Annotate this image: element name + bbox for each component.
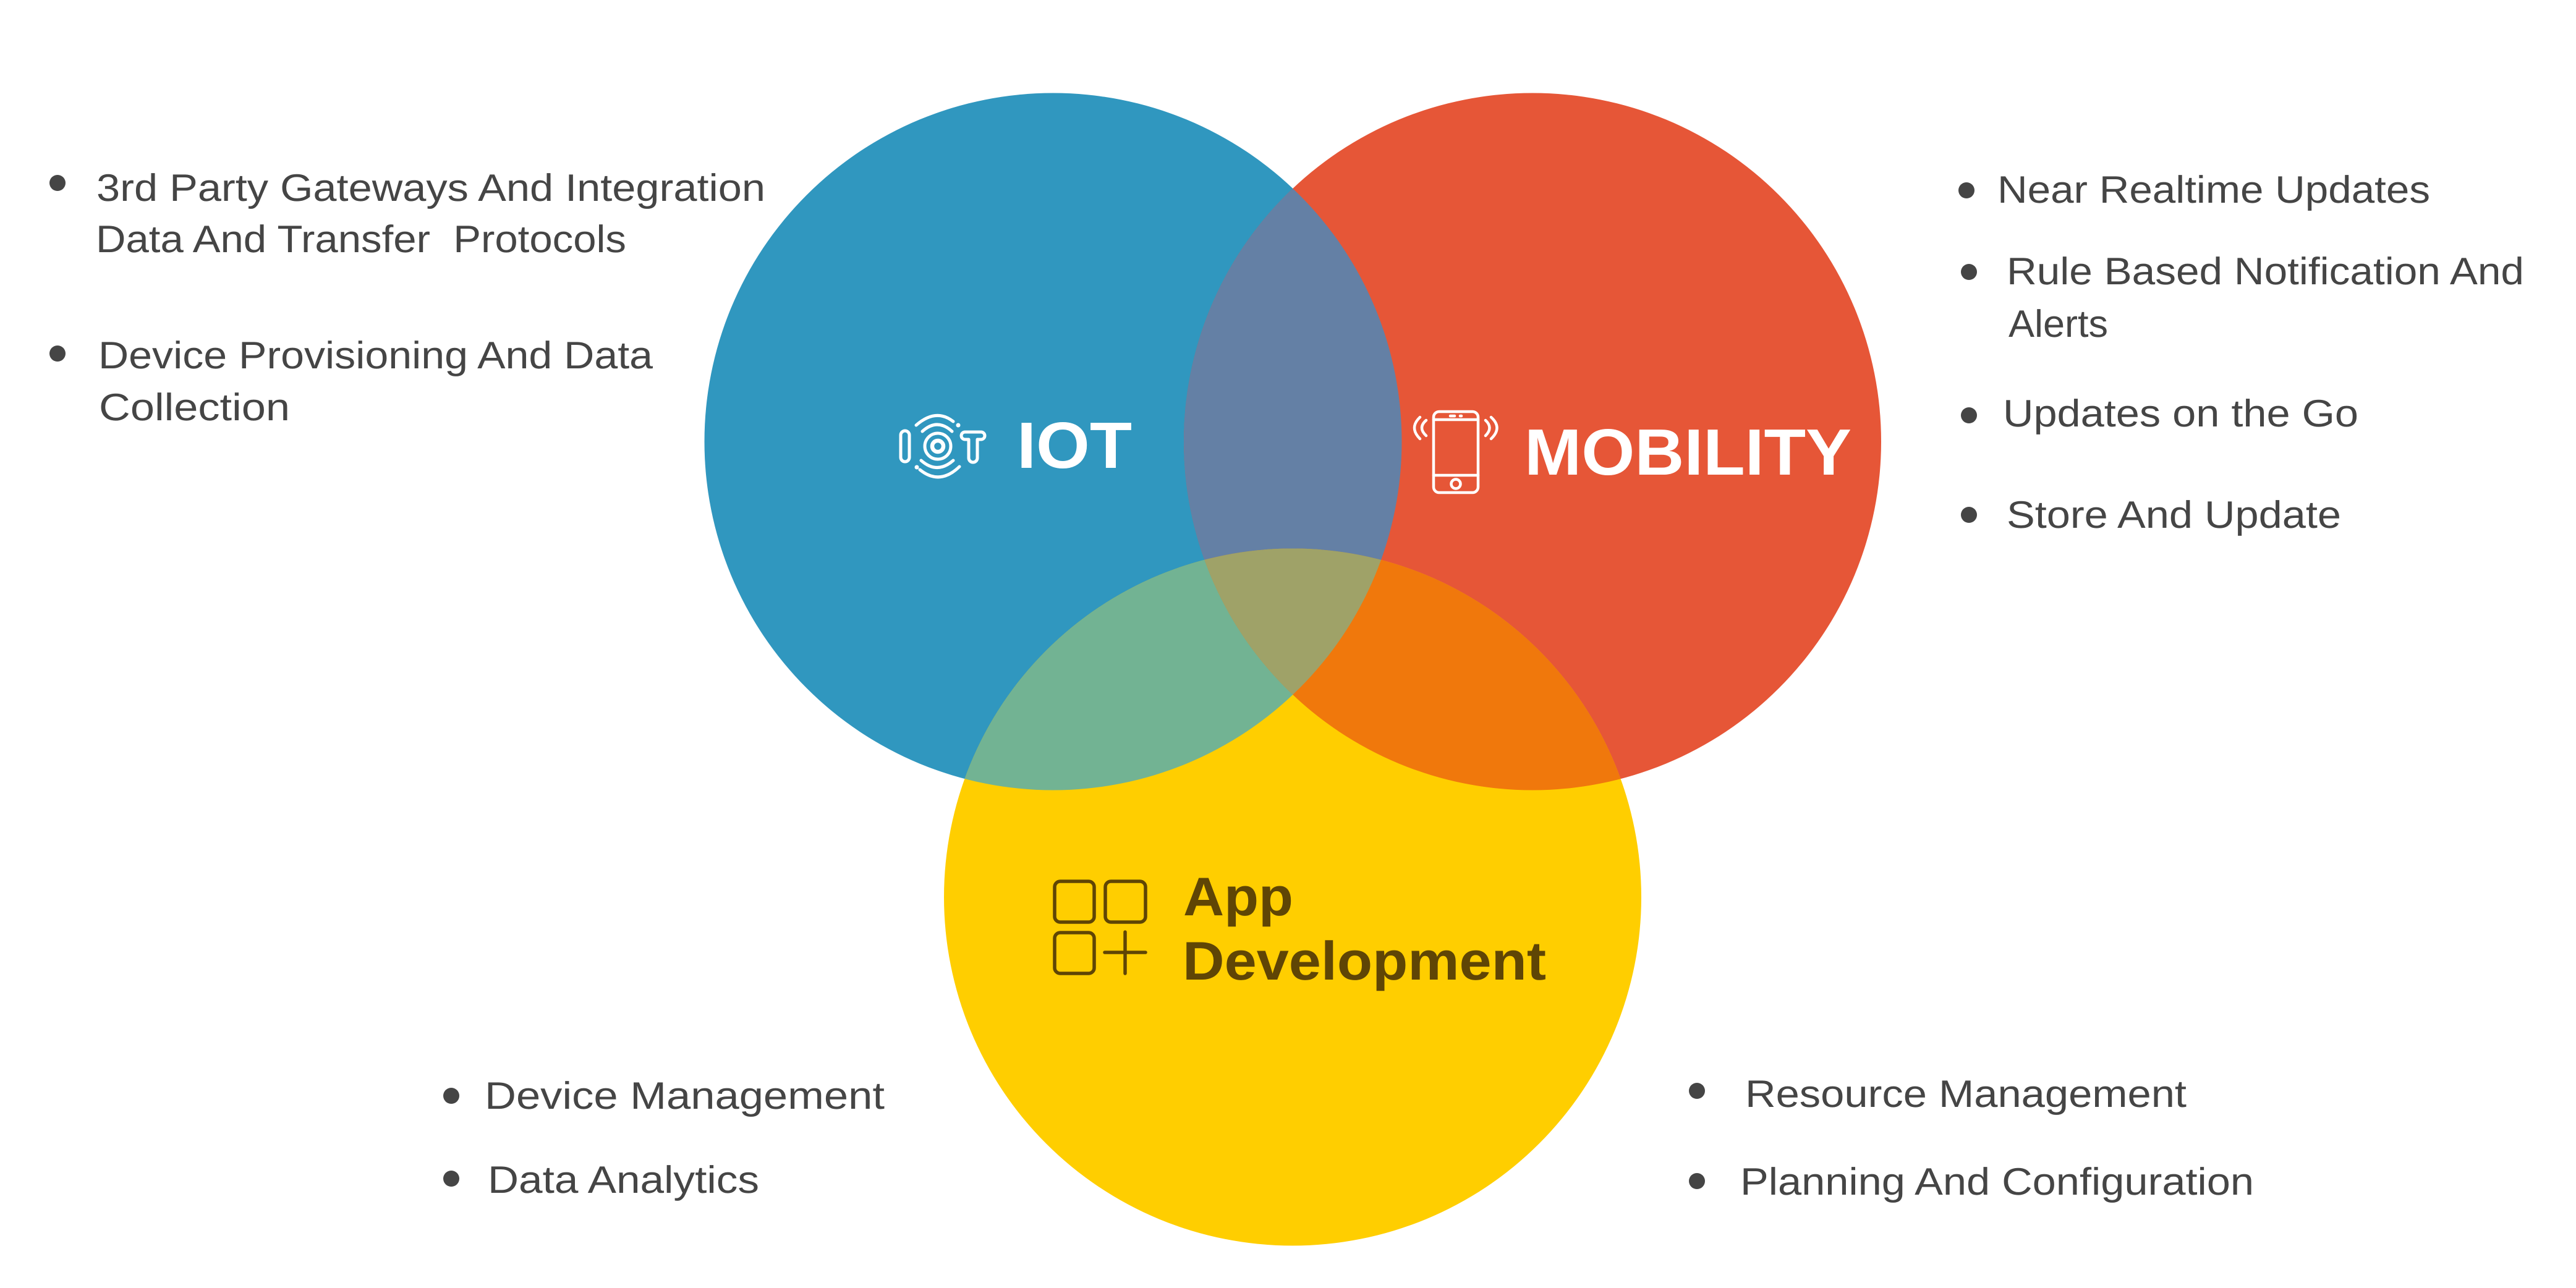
bullet: gateways (49, 167, 765, 261)
bullet: gateways: 3rd Party Gateways And Integration (96, 167, 765, 210)
heading: IOT: IOT (1017, 409, 1132, 482)
overlap: IoT and App Development (964, 560, 1293, 790)
text block: Mobility features (1958, 169, 2524, 536)
icon: mobile phone (1414, 412, 1497, 493)
circle: IoT (705, 93, 1402, 790)
circle: Mobility (1184, 93, 1881, 790)
bullet: notifications (1961, 250, 2524, 345)
heading: App Development: Development (1183, 930, 1546, 991)
bullet: provisioning: Collection (99, 386, 290, 429)
heading: MOBILITY: MOBILITY (1524, 416, 1851, 489)
overlap: Mobility and App Development (1204, 549, 1621, 790)
icon: IoT (901, 415, 985, 477)
bullet: store: Store And Update (2007, 494, 2341, 536)
heading: App Development: App (1183, 866, 1293, 927)
bullet: data analytics: Data Analytics (488, 1159, 759, 1201)
circle: App Development (944, 549, 1641, 1246)
bullet: provisioning (49, 334, 653, 429)
bullet: planning: Planning And Configuration (1740, 1161, 2254, 1203)
bullet: resource management: Resource Management (1745, 1073, 2187, 1116)
bullet: gateways: Data And Transfer Protocols (96, 218, 626, 261)
text block: device management and analytics (443, 1075, 885, 1201)
bullet: on the go: Updates on the Go (2003, 392, 2358, 435)
venn diagram (705, 93, 1881, 1246)
bullet: provisioning: Device Provisioning And Data (98, 334, 653, 377)
bullet: notifications: Rule Based Notification And (2007, 250, 2524, 293)
overlap: IoT and Mobility (1184, 189, 1402, 560)
bullet: near realtime: Near Realtime Updates (1997, 169, 2430, 211)
bullet: device management: Device Management (485, 1075, 885, 1117)
overlap: all three circles (1204, 549, 1381, 695)
icon: app grid (1055, 881, 1146, 973)
text block: IoT features (49, 167, 765, 429)
bullet: notifications: Alerts (2009, 303, 2108, 345)
heading: App Development (1183, 866, 1546, 991)
text block: resources and planning (1689, 1073, 2254, 1203)
